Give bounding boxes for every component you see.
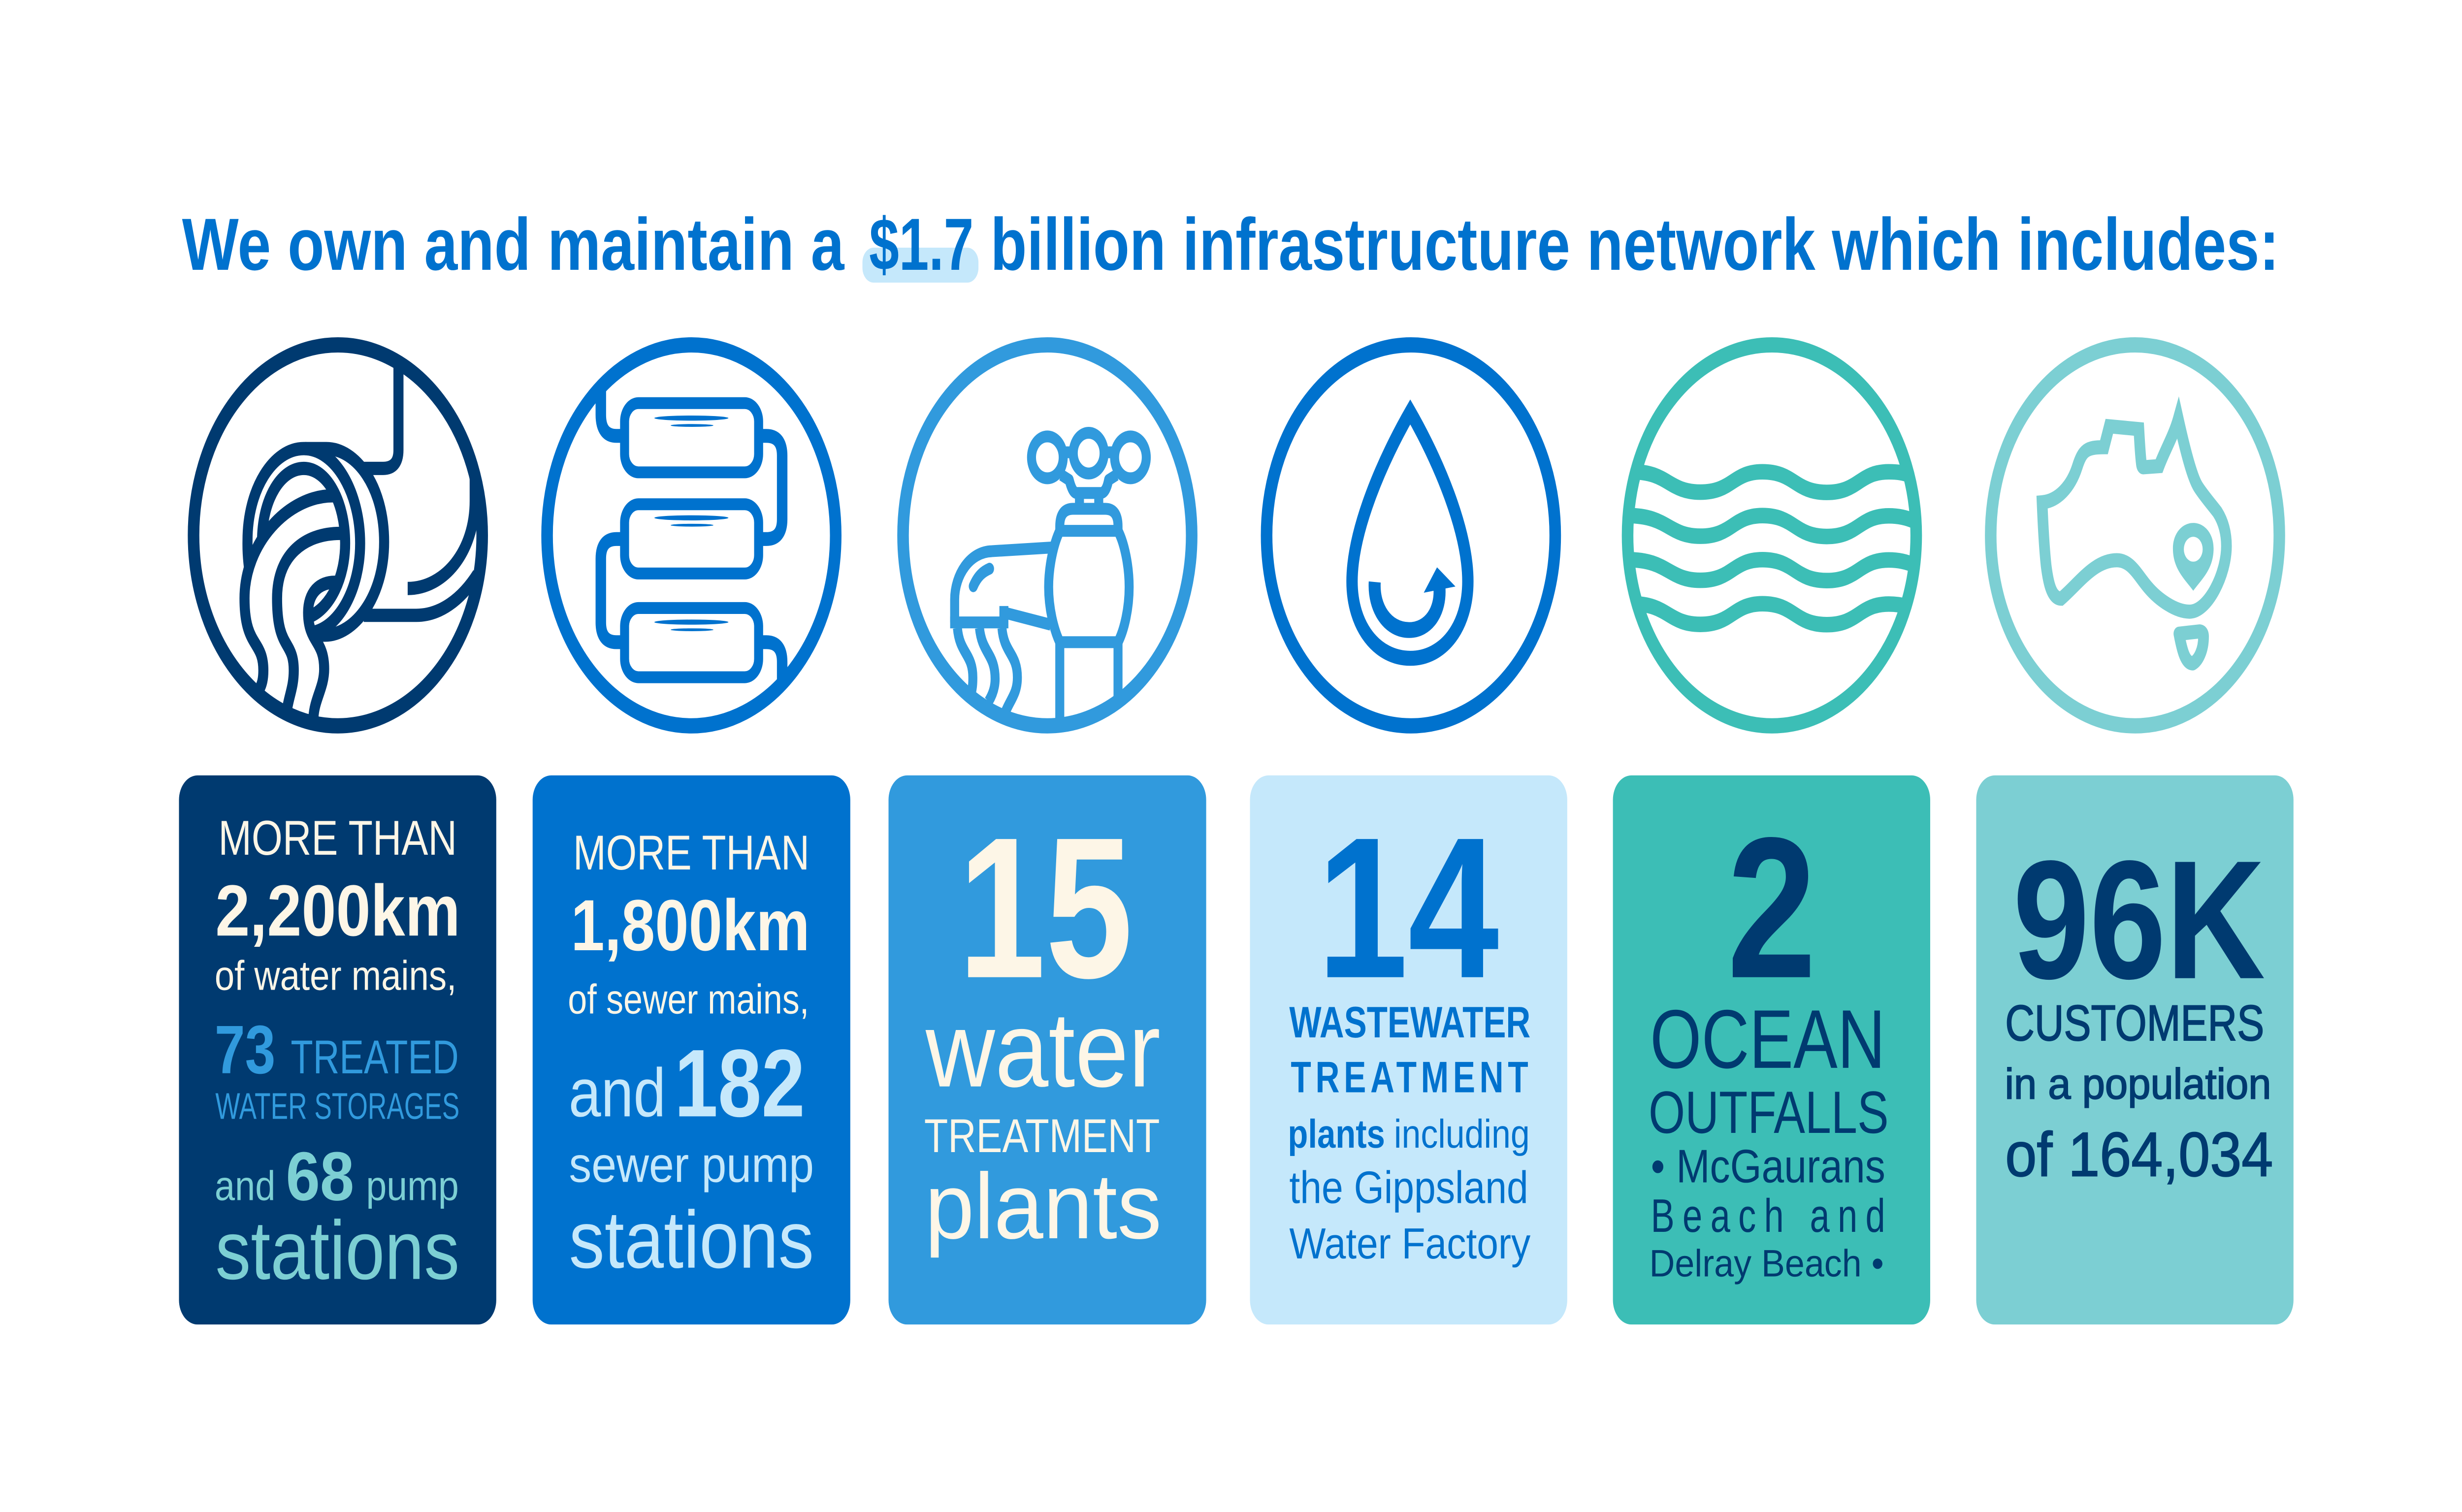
outfalls text: OUTFALLS — [1649, 1079, 1889, 1146]
plants text — [924, 796, 1162, 1258]
outfalls text: Delray Beach • — [1649, 1242, 1884, 1285]
outfalls text — [1649, 796, 1889, 1285]
customers text — [2005, 826, 2273, 1190]
card: ocean outfalls — [1613, 775, 1930, 1324]
sewer pump stations text: sewer pump — [569, 1137, 814, 1193]
pump stations text: 68 — [286, 1137, 354, 1215]
sewer pump stations text — [569, 1029, 814, 1286]
pump stations text: and — [215, 1163, 275, 1209]
sewer length text — [568, 825, 810, 1023]
stat text: 2,200km — [215, 870, 460, 951]
card background — [179, 775, 496, 1324]
icon: water pipe — [194, 345, 482, 726]
card background — [1976, 775, 2294, 1324]
column: ocean outfalls — [1613, 345, 1930, 1324]
plants text: TREATMENT — [924, 1109, 1160, 1162]
stat text: MORE THAN — [218, 811, 457, 866]
stat text: of water mains, — [215, 953, 456, 999]
customers text: in a population — [2005, 1060, 2271, 1108]
sewer length text: of sewer mains, — [568, 976, 809, 1023]
card: customers — [1976, 775, 2294, 1324]
treated storages text: 73 — [215, 1011, 275, 1088]
sewer length text: 1,800km — [571, 885, 810, 966]
treated storages text: TREATED — [291, 1030, 459, 1084]
wastewater text: plants — [1288, 1112, 1385, 1157]
wastewater text: WASTEWATER — [1289, 998, 1530, 1047]
icon: recycling water drop — [1266, 345, 1555, 726]
wastewater text: TREATMENT — [1291, 1053, 1528, 1102]
sewer pump stations text: stations — [569, 1195, 814, 1286]
highlight behind amount — [863, 248, 978, 283]
outfalls text: • McGaurans — [1651, 1140, 1885, 1193]
pump stations text — [215, 1137, 459, 1297]
customers text: of 164,034 — [2005, 1120, 2273, 1190]
icon: connected tanks — [547, 345, 836, 726]
card background — [1250, 775, 1567, 1324]
title — [182, 203, 2279, 286]
title: billion infrastructure network which includes: — [990, 203, 2279, 286]
outfalls text: 2 — [1727, 796, 1816, 1020]
icon: map of Australia with pin — [1991, 345, 2279, 726]
icon: tap — [903, 345, 1192, 726]
sewer length text: MORE THAN — [573, 825, 810, 880]
wastewater text: the Gippsland — [1289, 1162, 1528, 1213]
outfalls text: OCEAN — [1650, 993, 1885, 1086]
outfalls text: Beach and — [1651, 1190, 1885, 1242]
wastewater text — [1288, 796, 1531, 1268]
column: sewer mains — [533, 345, 850, 1324]
card background — [533, 775, 850, 1324]
card: sewer mains — [533, 775, 850, 1324]
card: wastewater treatment plants — [1250, 775, 1567, 1324]
pump stations text: pump — [366, 1163, 459, 1209]
sewer pump stations text: and — [569, 1054, 666, 1131]
card: water mains — [179, 775, 496, 1324]
wastewater text: Water Factory — [1289, 1219, 1531, 1268]
icon: ocean waves — [1627, 345, 1916, 726]
column: wastewater treatment — [1250, 345, 1567, 1324]
customers text: CUSTOMERS — [2005, 995, 2264, 1051]
column: water mains — [179, 345, 496, 1324]
card background — [1613, 775, 1930, 1324]
card background — [888, 775, 1206, 1324]
title: We own and maintain a — [182, 203, 845, 286]
plants text: water — [925, 991, 1161, 1109]
column: customers — [1976, 345, 2294, 1324]
wastewater text: including — [1394, 1112, 1530, 1157]
plants text: 15 — [958, 796, 1133, 1020]
customers text: 96K — [2013, 826, 2266, 1014]
pump stations text: stations — [215, 1204, 459, 1297]
stat text — [215, 811, 460, 999]
card: water treatment plants — [888, 775, 1206, 1324]
column: water treatment — [888, 345, 1206, 1324]
treated storages text — [215, 1011, 459, 1127]
treated storages text: WATER STORAGES — [215, 1086, 459, 1127]
plants text: plants — [925, 1155, 1162, 1258]
title: $1.7 — [869, 203, 973, 286]
wastewater text: 14 — [1317, 796, 1500, 1020]
sewer pump stations text: 182 — [675, 1029, 805, 1137]
